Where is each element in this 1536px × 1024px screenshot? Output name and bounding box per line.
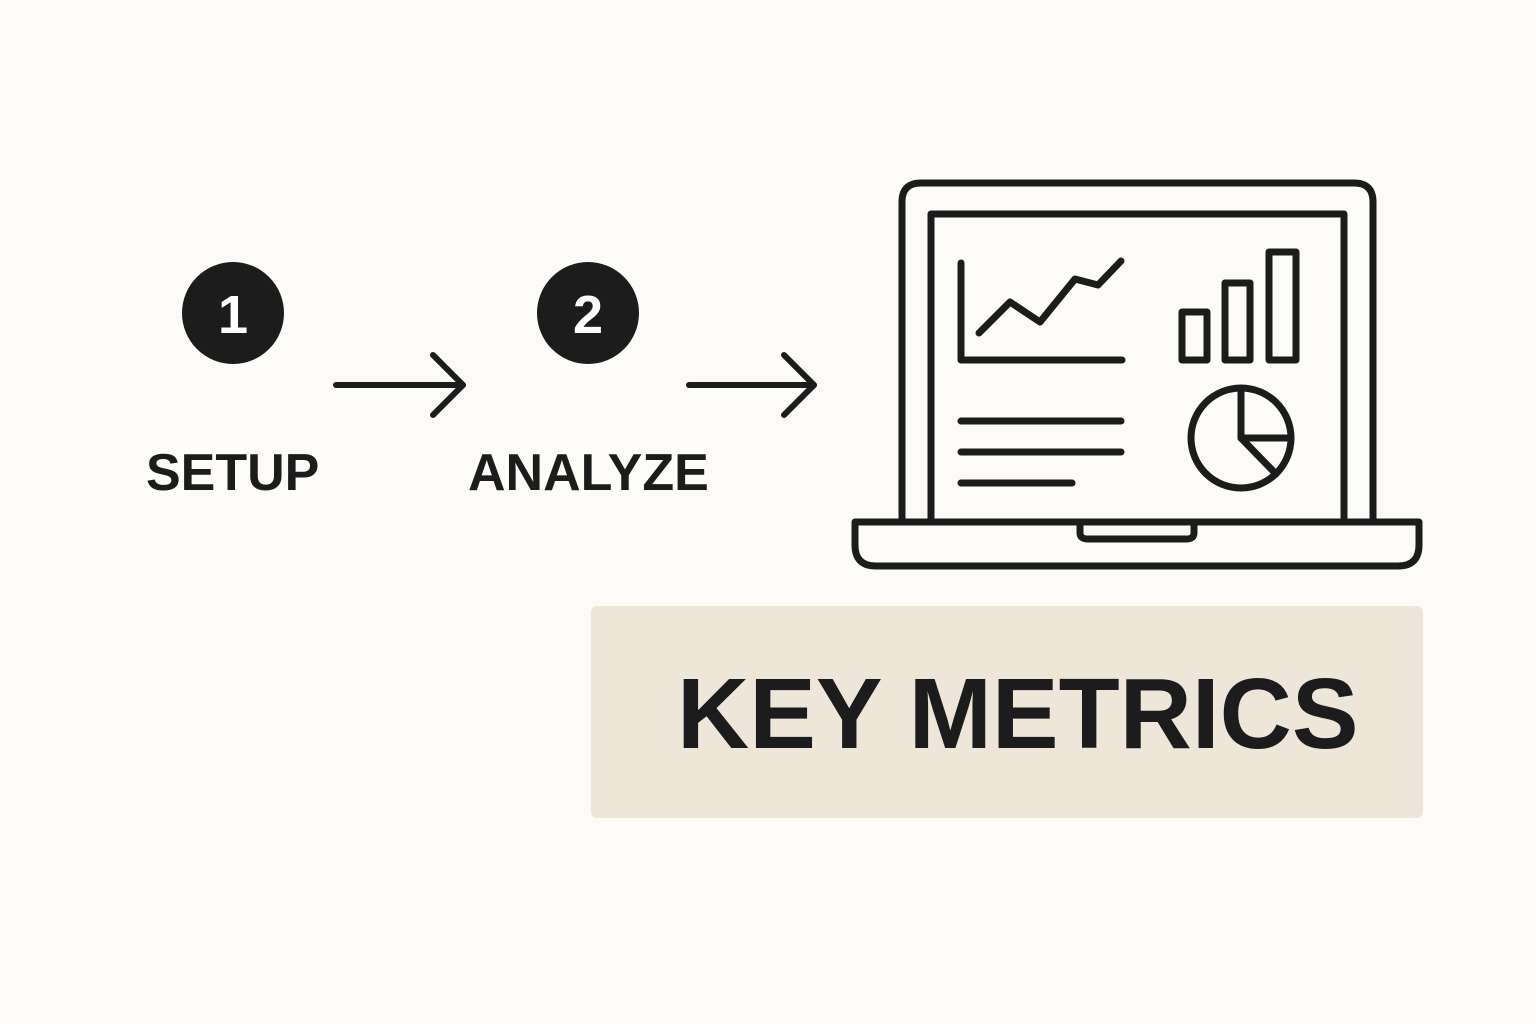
step 2 label: ANALYZE: ANALYZE bbox=[468, 444, 709, 502]
step 2 badge: 2 bbox=[573, 285, 603, 345]
key metrics heading: KEY METRICS bbox=[677, 658, 1359, 770]
arrow 2 bbox=[689, 355, 814, 415]
step 1 badge: 1 bbox=[218, 285, 248, 345]
bar chart bbox=[1182, 252, 1296, 360]
key metrics panel bbox=[591, 606, 1423, 818]
text lines bbox=[961, 421, 1121, 483]
step 1 label: SETUP: SETUP bbox=[146, 444, 319, 502]
arrow 1 bbox=[336, 355, 463, 415]
line chart bbox=[961, 261, 1122, 360]
pie chart bbox=[1191, 388, 1291, 488]
step 2 badge bbox=[537, 262, 639, 364]
icon: laptop dashboard bbox=[855, 183, 1419, 566]
step 1 badge bbox=[182, 262, 284, 364]
